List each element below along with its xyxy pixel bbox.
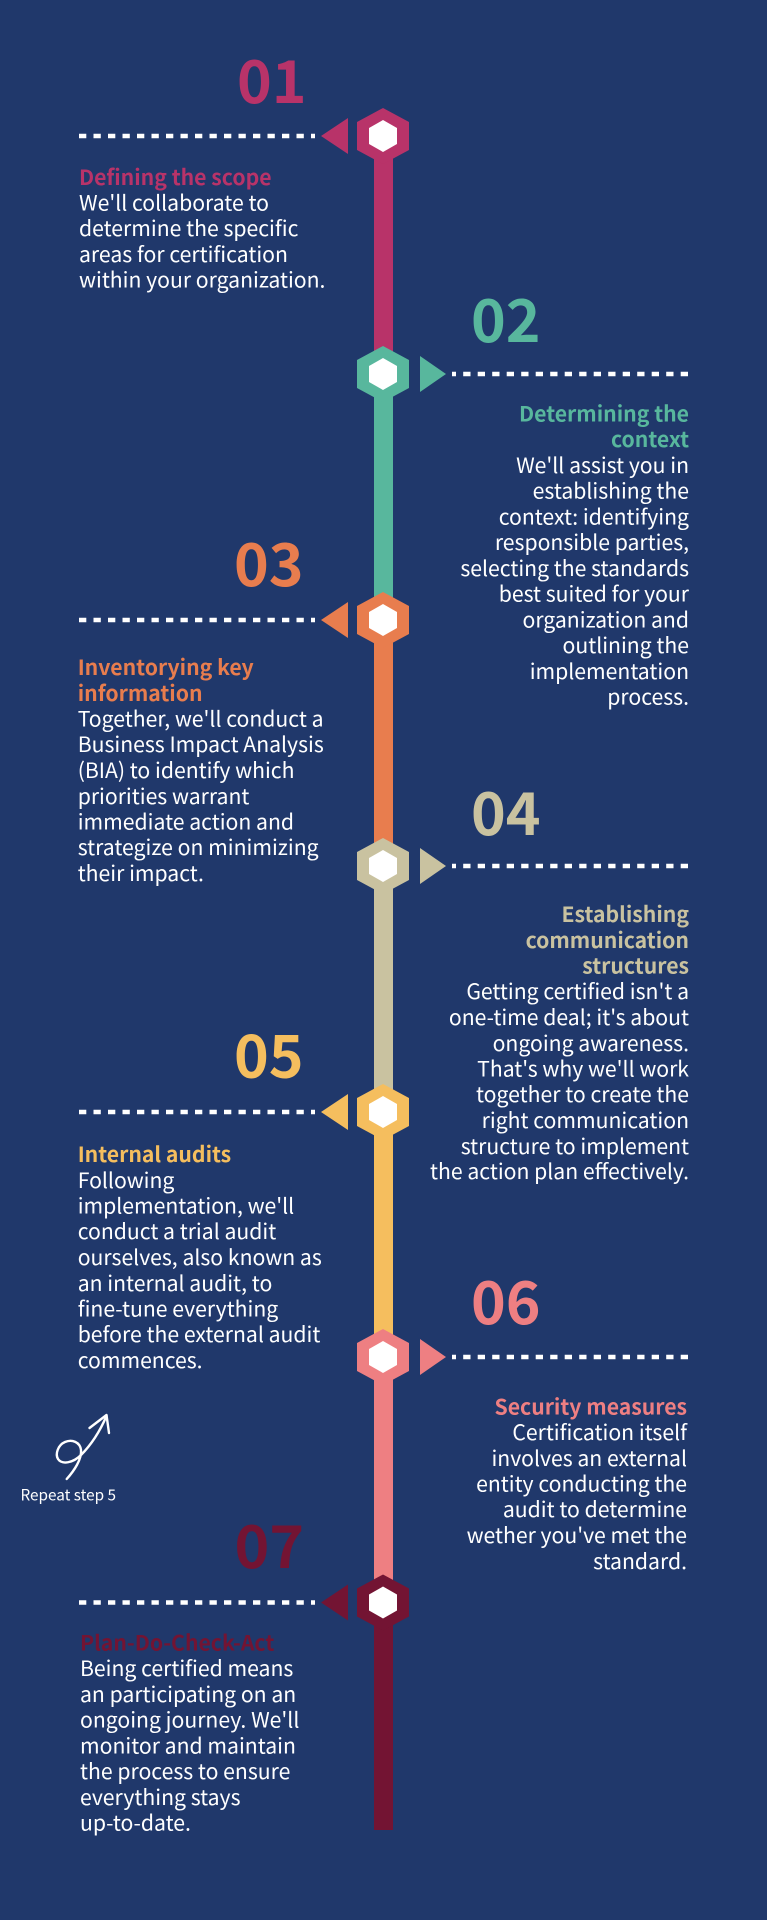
text: plan-do-check-act bbox=[80, 1626, 299, 1838]
text: determining the context: implementation bbox=[530, 655, 689, 686]
icon: looping arrow bbox=[57, 1415, 109, 1479]
number 07: 07 bbox=[234, 1500, 304, 1585]
number 06: 06 bbox=[471, 1256, 541, 1341]
text: internal audits: implementation, we'll bbox=[78, 1190, 294, 1221]
text: determining the context: responsible parties, bbox=[495, 526, 689, 557]
step 02 bbox=[357, 274, 690, 712]
arrow marker bbox=[420, 848, 446, 884]
step 06 bbox=[357, 1256, 688, 1576]
text: establishing communication structures: Getting certified isn't a bbox=[466, 975, 689, 1006]
step 03 bbox=[78, 518, 409, 888]
text: security measures: Certification itself bbox=[512, 1416, 688, 1447]
step 05 bbox=[78, 1010, 409, 1375]
text: internal audits: fine-tune everything bbox=[78, 1292, 278, 1324]
text: inventorying key information: immediate action and bbox=[78, 806, 294, 837]
text: inventorying key information: their impact. bbox=[78, 857, 204, 888]
text: establishing communication structures: together to create the bbox=[476, 1078, 689, 1109]
text: establishing communication structures: That's why we'll work bbox=[477, 1052, 689, 1084]
text: inventorying key information: Business Impact Analysis bbox=[78, 728, 324, 759]
text: inventorying key information bbox=[78, 651, 324, 888]
text: plan-do-check-act: Plan-Do-Check-Act bbox=[80, 1626, 274, 1658]
text: determining the context: Determining the bbox=[519, 398, 689, 428]
text: security measures: audit to determine bbox=[503, 1493, 687, 1524]
text: determining the context: context bbox=[611, 423, 689, 454]
text: determining the context: context: identifying bbox=[499, 500, 689, 532]
text: internal audits: commences. bbox=[78, 1344, 203, 1375]
text: internal audits: Internal audits bbox=[78, 1138, 231, 1169]
text: determining the context: establishing the bbox=[533, 475, 689, 506]
number 05: 05 bbox=[234, 1010, 304, 1094]
text: establishing communication structures: right communication bbox=[482, 1104, 689, 1135]
text: defining the scope bbox=[79, 161, 325, 294]
text: inventorying key information: priorities warrant bbox=[78, 780, 249, 811]
number 01: 01 bbox=[237, 35, 307, 120]
text: security measures: entity conducting the bbox=[476, 1468, 687, 1499]
text: plan-do-check-act: everything stays bbox=[80, 1781, 241, 1812]
text: defining the scope: within your organization. bbox=[79, 264, 325, 294]
text: defining the scope: We'll collaborate to bbox=[79, 186, 269, 218]
text: plan-do-check-act: ongoing journey. We'll bbox=[80, 1704, 299, 1735]
arrow marker bbox=[420, 1339, 446, 1375]
arrow marker bbox=[321, 118, 348, 154]
text: inventorying key information: (BIA) to identify which bbox=[78, 754, 294, 785]
arrow marker bbox=[420, 356, 446, 392]
text: plan-do-check-act: monitor and maintain bbox=[80, 1729, 296, 1760]
arrow marker bbox=[321, 602, 348, 638]
hexagon node bbox=[357, 838, 409, 894]
text: security measures: wether you've met the bbox=[467, 1519, 687, 1550]
text: internal audits: before the external audit bbox=[78, 1318, 320, 1349]
text: security measures: Security measures bbox=[494, 1390, 687, 1422]
text: establishing communication structures: structures bbox=[582, 950, 689, 980]
text: determining the context: organization and bbox=[522, 604, 689, 634]
text: establishing communication structures bbox=[430, 898, 689, 1186]
hexagon node bbox=[357, 108, 409, 164]
text: determining the context: best suited for your bbox=[499, 578, 690, 609]
text: defining the scope: determine the specific bbox=[79, 212, 299, 243]
hexagon node bbox=[357, 346, 409, 402]
text: determining the context bbox=[460, 398, 690, 712]
text: determining the context: We'll assist you in bbox=[516, 449, 689, 480]
step 04 bbox=[357, 767, 689, 1186]
label: repeat step 5: Repeat step 5 bbox=[20, 1484, 116, 1506]
text: determining the context: process. bbox=[607, 681, 689, 712]
hexagon node bbox=[357, 592, 409, 648]
hexagon node bbox=[357, 1084, 409, 1140]
text: defining the scope: areas for certification bbox=[79, 238, 288, 269]
repeat step 5 note bbox=[20, 1415, 116, 1506]
text: inventorying key information: strategize on minimizing bbox=[78, 831, 319, 862]
text: inventorying key information: information bbox=[78, 677, 203, 708]
text: establishing communication structures: ongoing awareness. bbox=[493, 1027, 689, 1058]
text: establishing communication structures: the action plan effectively. bbox=[430, 1155, 689, 1186]
text: plan-do-check-act: an participating on an bbox=[80, 1678, 296, 1709]
step 01 bbox=[79, 35, 409, 294]
arrow marker bbox=[321, 1584, 348, 1620]
text: security measures: standard. bbox=[593, 1545, 687, 1576]
text: plan-do-check-act: up-to-date. bbox=[80, 1806, 191, 1838]
hexagon node bbox=[357, 1329, 409, 1385]
text: internal audits: Following bbox=[78, 1164, 174, 1195]
text: inventorying key information: Inventorying key bbox=[78, 651, 254, 682]
text: establishing communication structures: structure to implement bbox=[461, 1130, 689, 1161]
text: establishing communication structures: one-time deal; it's about bbox=[449, 1001, 689, 1032]
text: determining the context: outlining the bbox=[562, 629, 689, 660]
text: inventorying key information: Together, we'll conduct a bbox=[78, 702, 324, 734]
text: defining the scope: Defining the scope bbox=[79, 161, 272, 192]
text: plan-do-check-act: Being certified means bbox=[80, 1652, 293, 1683]
timeline spine bbox=[374, 136, 393, 1830]
number 02: 02 bbox=[471, 274, 541, 359]
number 04: 04 bbox=[471, 767, 541, 852]
step 07 bbox=[79, 1500, 409, 1838]
text: internal audits bbox=[78, 1138, 322, 1375]
text: internal audits: ourselves, also known as bbox=[78, 1241, 322, 1272]
text: internal audits: an internal audit, to bbox=[78, 1267, 272, 1298]
text: security measures bbox=[467, 1390, 688, 1576]
text: establishing communication structures: communication bbox=[526, 924, 689, 955]
text: plan-do-check-act: the process to ensure bbox=[80, 1755, 290, 1786]
text: internal audits: conduct a trial audit bbox=[78, 1215, 276, 1246]
text: determining the context: selecting the standards bbox=[460, 552, 689, 583]
text: establishing communication structures: Establishing bbox=[562, 898, 689, 929]
number 03: 03 bbox=[234, 518, 304, 603]
text: security measures: involves an external bbox=[491, 1442, 687, 1473]
arrow marker bbox=[321, 1094, 348, 1130]
hexagon node bbox=[357, 1574, 409, 1630]
